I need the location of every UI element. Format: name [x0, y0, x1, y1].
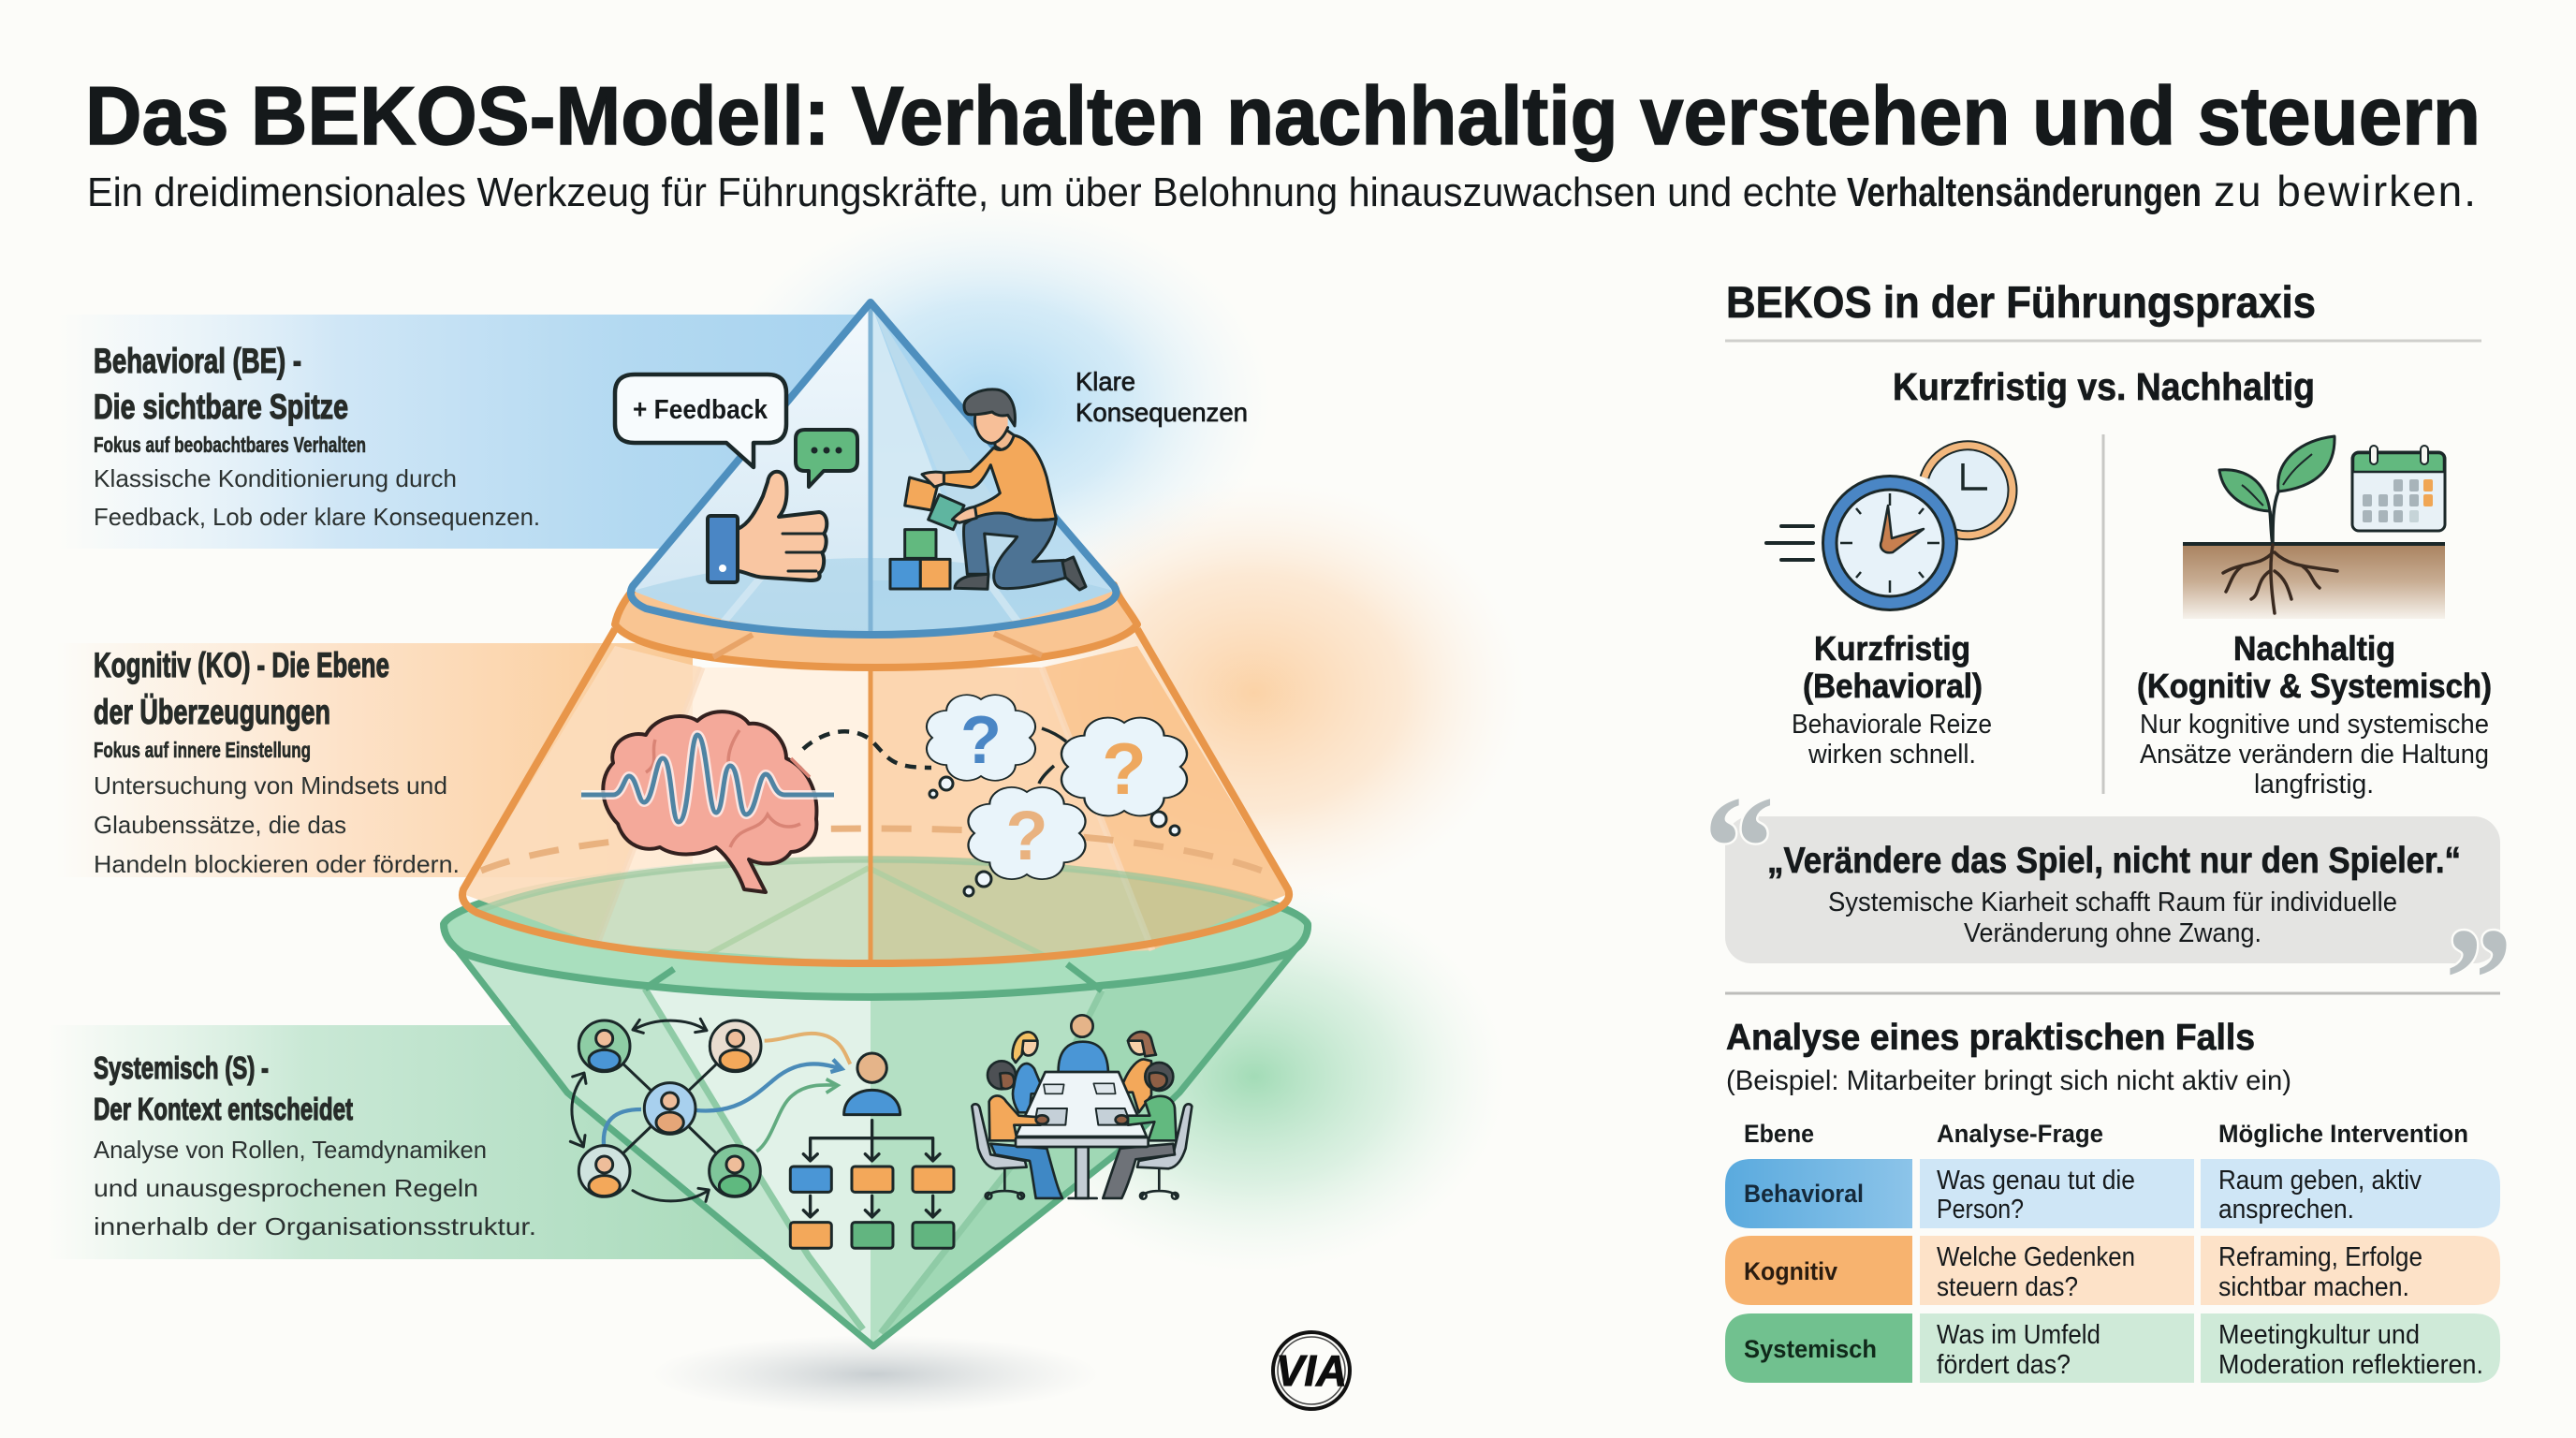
icon: thought clouds	[927, 695, 1187, 896]
text block: nachhaltig: langfristig.	[2254, 770, 2374, 800]
row: kognitiv: Kognitiv	[1744, 1257, 1837, 1285]
heading: Analyse eines praktischen Falls	[1726, 1018, 2291, 1096]
row: kognitiv: Reframing, Erfolge	[2218, 1242, 2422, 1272]
callout: quote box: Veränderung ohne Zwang.	[1964, 918, 2261, 948]
text block: kurzfristig	[1792, 629, 1992, 770]
text block: behavioral: Klassische Konditionierung durch	[94, 464, 457, 492]
row: behavioral	[1725, 1159, 2500, 1228]
icon: dashed connector	[803, 731, 931, 768]
callout: quote box: “	[1704, 766, 1775, 928]
text block: kognitiv: Fokus auf innere Einstellung	[94, 738, 311, 762]
callout: quote box: „Verändere das Spiel, nicht nur den Spieler.“	[1767, 841, 2461, 881]
text block: behavioral	[94, 342, 540, 531]
text block: kurzfristig: (Behavioral)	[1803, 667, 1983, 705]
logo: VIA	[1273, 1332, 1350, 1409]
text block: behavioral: Feedback, Lob oder klare Konsequenzen.	[94, 503, 540, 531]
panel: systemisch band	[47, 1025, 786, 1259]
text block: behavioral: Behavioral (BE) -	[94, 342, 301, 380]
label: klare konsequenzen: Konsequenzen	[1076, 398, 1248, 427]
label: klare konsequenzen: Klare	[1076, 367, 1135, 396]
pyramid: orange layer	[462, 585, 1289, 963]
subtitle: zu bewirken.	[2214, 167, 2476, 215]
callout: quote box: Systemische Kiarheit schafft Raum für individuelle	[1828, 888, 2397, 917]
text block: kurzfristig: Kurzfristig	[1814, 629, 1970, 668]
heading: Kurzfristig vs. Nachhaltig: Kurzfristig vs. Nachhaltig	[1893, 365, 2315, 408]
panel: behavioral band	[56, 315, 871, 549]
text block: systemisch: Analyse von Rollen, Teamdynamiken	[94, 1136, 487, 1164]
text block: kurzfristig: Behaviorale Reize	[1792, 710, 1992, 740]
icon: clocks	[1766, 446, 2012, 611]
text block: kognitiv: Handeln blockieren oder fördern.	[94, 850, 460, 878]
heading: Analyse eines praktischen Falls: Analyse eines praktischen Falls	[1726, 1018, 2255, 1058]
icon: team meeting	[972, 1015, 1192, 1199]
table header: Analyse-Frage	[1937, 1120, 2103, 1148]
icon: thought clouds: ?	[960, 703, 1002, 778]
text block: kognitiv	[94, 646, 460, 878]
row: systemisch: Was im Umfeld	[1937, 1320, 2100, 1350]
shadow under pyramid	[651, 1335, 1100, 1414]
row: behavioral: Raum geben, aktiv	[2218, 1166, 2422, 1196]
text block: kurzfristig: wirken schnell.	[1808, 740, 1976, 770]
pyramid: green layer	[444, 859, 1308, 1346]
heading: BEKOS in der Führungspraxis: BEKOS in der Führungspraxis	[1726, 277, 2316, 327]
text block: systemisch: Systemisch (S) -	[94, 1050, 269, 1085]
icon: green chat bubble	[796, 430, 857, 487]
table: case analysis	[1725, 1120, 2500, 1383]
row: systemisch: fördert das?	[1937, 1350, 2071, 1380]
callout: quote box: ”	[2445, 898, 2512, 1060]
title: Das BEKOS-Modell: Verhalten nachhaltig verstehen und steuern	[85, 69, 2481, 162]
row: kognitiv	[1725, 1236, 2500, 1305]
table header	[1744, 1120, 2468, 1148]
icon: thumbs up	[708, 472, 827, 582]
row: systemisch	[1725, 1313, 2500, 1383]
icon: feedback bubble	[615, 374, 786, 467]
pyramid: blue layer	[631, 302, 1116, 635]
table header: Ebene	[1744, 1120, 1814, 1148]
table header: Mögliche Intervention	[2218, 1120, 2468, 1148]
label: klare konsequenzen	[1076, 367, 1248, 427]
row: behavioral: Behavioral	[1744, 1180, 1864, 1208]
text block: systemisch	[94, 1050, 536, 1240]
row: systemisch: Meetingkultur und	[2218, 1320, 2420, 1350]
text block: nachhaltig: Ansätze verändern die Haltung	[2140, 740, 2489, 770]
row: systemisch: Systemisch	[1744, 1335, 1877, 1363]
text block: systemisch: Der Kontext entscheidet	[94, 1092, 353, 1126]
text block: nachhaltig: (Kognitiv & Systemisch)	[2137, 667, 2492, 705]
row: behavioral: ansprechen.	[2218, 1195, 2354, 1225]
row: behavioral: Was genau tut die	[1937, 1166, 2135, 1196]
subtitle: Verhaltensänderungen	[1847, 169, 2202, 215]
text block: behavioral: Die sichtbare Spitze	[94, 388, 348, 426]
text block: nachhaltig: Nachhaltig	[2233, 629, 2395, 668]
text block: kognitiv: der Überzeugungen	[94, 693, 330, 731]
row: kognitiv: sichtbar machen.	[2218, 1272, 2409, 1302]
heading: Analyse eines praktischen Falls: (Beispiel: Mitarbeiter bringt sich nicht aktiv ein)	[1726, 1065, 2291, 1096]
row: systemisch: Moderation reflektieren.	[2218, 1350, 2483, 1380]
icon: feedback bubble: + Feedback	[633, 395, 768, 425]
background glows	[711, 201, 1526, 1273]
text block: systemisch: und unausgesprochenen Regeln	[94, 1174, 478, 1202]
icon: plant with calendar	[2183, 436, 2445, 619]
row: behavioral: Person?	[1937, 1195, 2024, 1225]
icon: people network	[570, 1019, 850, 1201]
text block: nachhaltig	[2137, 629, 2492, 800]
callout: quote box	[1704, 766, 2512, 1060]
icon: brain with wave	[581, 712, 834, 892]
subtitle: Ein dreidimensionales Werkzeug für Führungskräfte, um über Belohnung hinauszuwachsen und echte	[87, 169, 1837, 215]
icon: org chart	[790, 1053, 954, 1248]
text block: kognitiv: Kognitiv (KO) - Die Ebene	[94, 646, 389, 684]
text block: kognitiv: Untersuchung von Mindsets und	[94, 771, 447, 800]
text block: behavioral: Fokus auf beobachtbares Verhalten	[94, 433, 366, 457]
icon: thought clouds: ?	[1005, 797, 1048, 874]
text block: systemisch: innerhalb der Organisationsstruktur.	[94, 1212, 536, 1240]
row: kognitiv: steuern das?	[1937, 1272, 2078, 1302]
icon: thought clouds: ?	[1102, 727, 1147, 810]
row: kognitiv: Welche Gedenken	[1937, 1242, 2135, 1272]
icon: person stacking blocks	[890, 389, 1086, 590]
logo: VIA: VIA	[1276, 1346, 1347, 1395]
text block: kognitiv: Glaubenssätze, die das	[94, 811, 346, 839]
panel: kognitiv band	[56, 643, 693, 877]
text block: nachhaltig: Nur kognitive und systemische	[2140, 710, 2489, 740]
